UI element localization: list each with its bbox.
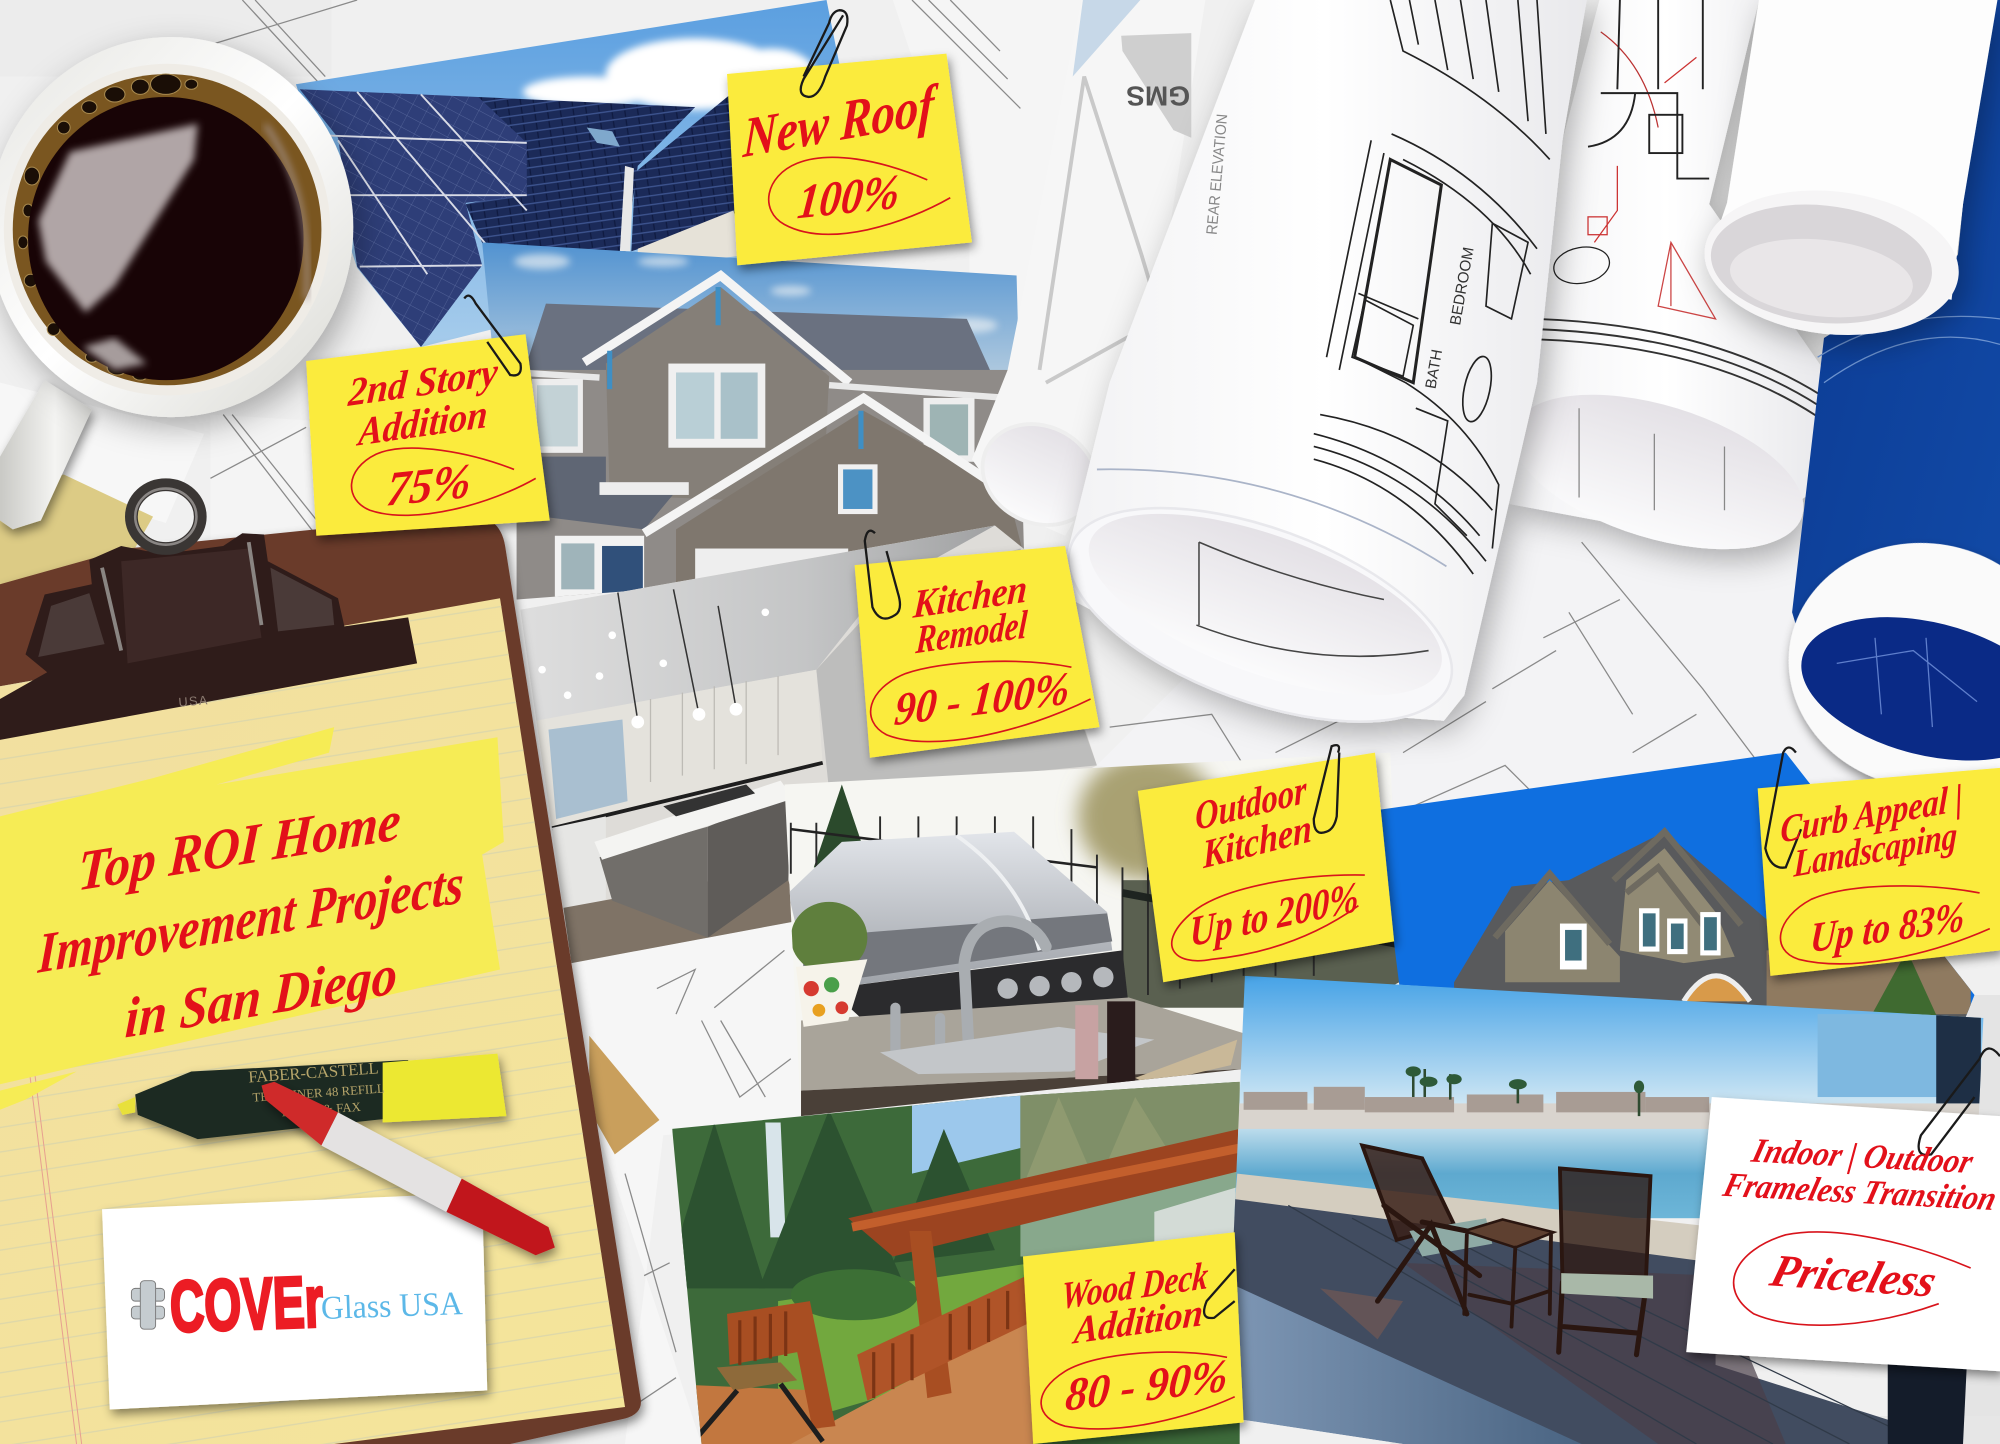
sticky note: wood deck addition: 80 - 90% [1063,1350,1230,1422]
deck chairs and table [1362,1146,1651,1355]
sticky note: wood deck addition: Wood Deck [1060,1255,1210,1318]
coffee cup [0,37,353,529]
logo icon [131,1281,165,1329]
photo: waterfront bay view [1218,969,1996,1444]
sticky note: kitchen remodel: Kitchen [911,565,1029,627]
faucet [895,921,1046,1061]
title: Top ROI Home [77,789,402,904]
sticky note: curb appeal [1758,748,2000,976]
note: indoor outdoor transition: Indoor | Outdoor [1747,1131,1978,1181]
sticky note: kitchen remodel [855,531,1099,758]
sticky note: 2nd story addition: 2nd Story [346,349,499,415]
title: in San Diego [124,943,399,1051]
clipboard [0,485,641,1444]
sticky note: kitchen remodel: Remodel [914,601,1029,662]
sticky note: wood deck addition [1023,1232,1244,1444]
note: indoor outdoor transition: Priceless [1764,1246,1942,1307]
left blueprint roll [966,0,1205,543]
sticky note: curb appeal: Landscaping [1792,815,1958,886]
photo: two story house [472,236,1033,612]
highlighter pen [117,1054,506,1139]
sticky note: outdoor kitchen: Outdoor [1194,766,1308,839]
third blueprint roll [1697,0,1997,347]
sticky note: 2nd story addition: 75% [384,453,474,517]
sticky note: 2nd story addition [306,296,550,536]
highlighter pen: TEXTLINER 48 REFILL [252,1081,385,1105]
clipboard clip [0,485,417,740]
photo: wood deck with pergola [663,1078,1250,1444]
main blueprint roll: BATH [1423,348,1446,390]
sticky note: 2nd story addition: Addition [354,391,489,455]
plant pot [791,902,867,1027]
highlighter pen: FABER-CASTELL [248,1058,379,1086]
sticky note: outdoor kitchen: Up to 200% [1190,873,1358,957]
title [36,789,465,1051]
sticky note: new roof [727,10,972,265]
main blueprint roll: REAR ELEVATION [1204,113,1231,235]
sticky note: new roof: New Roof [741,72,939,170]
cup body [0,37,353,417]
blue blueprint roll [1769,0,2000,810]
clipboard board [0,514,641,1444]
clipboard clip: USA [178,692,209,710]
photo: outdoor kitchen grill [778,753,1403,1123]
sticky note: wood deck addition: Addition [1071,1292,1205,1353]
title: Improvement Projects [36,852,465,986]
highlighter pen: PAPER & FAX [281,1100,361,1119]
logo card [102,1193,487,1410]
photo: roof with solar panels [287,0,861,357]
logo tagline: Glass USA [320,1285,463,1327]
sticky note: outdoor kitchen [1138,745,1394,982]
sticky note: outdoor kitchen: Kitchen [1201,805,1312,878]
blueprint rolls [966,0,2000,810]
logo wordmark: COVEr [169,1261,324,1348]
note: indoor outdoor transition [1686,1049,2000,1371]
sticky note: new roof: 100% [795,163,902,229]
coffee [13,74,321,385]
photo: curb appeal house [1380,752,1974,1017]
second blueprint roll [1495,0,1823,579]
photo: kitchen [510,517,1110,976]
coffee bubbles [18,74,198,380]
red marker [261,1082,555,1255]
main blueprint roll [1041,0,1587,765]
sticky note: kitchen remodel: 90 - 100% [893,663,1072,736]
left blueprint roll: GMS [1126,81,1190,112]
sticky note: curb appeal: Curb Appeal | [1780,777,1963,852]
coffee reflection [38,124,198,313]
sticky note: curb appeal: Up to 83% [1809,893,1966,962]
house window [668,364,765,448]
highlighter swash [0,727,504,1110]
main blueprint roll: BEDROOM [1447,246,1478,327]
legal pad paper [0,598,625,1444]
floor plan linework [1314,0,1550,574]
cup handle [0,380,92,529]
